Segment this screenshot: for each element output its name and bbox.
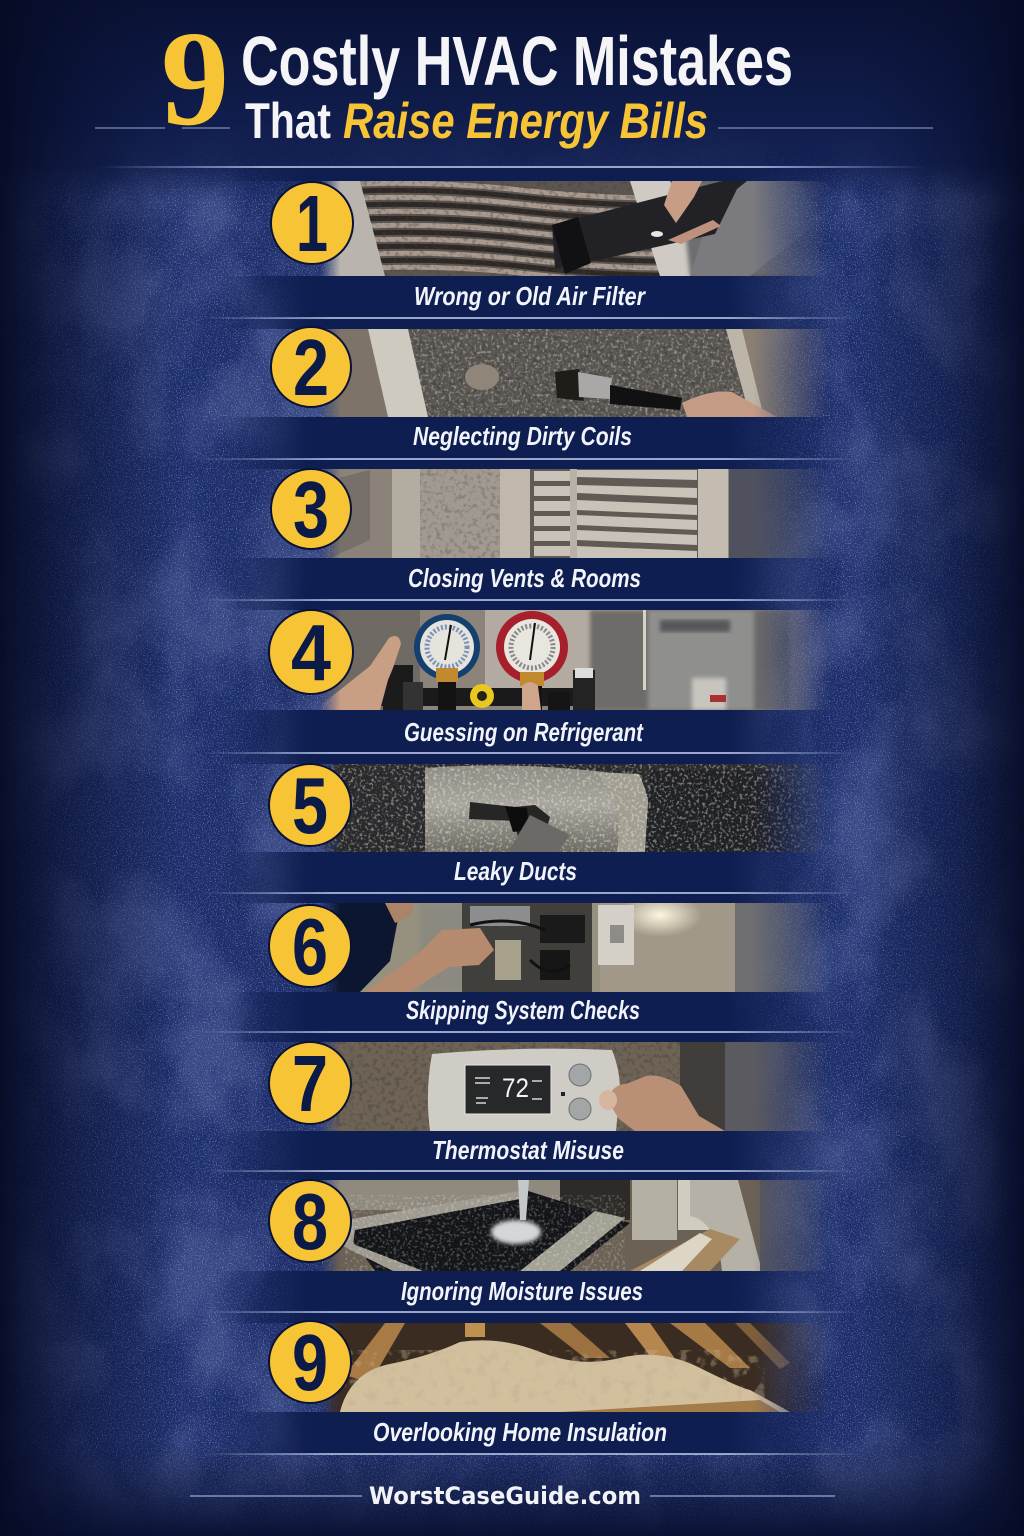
mistake 5 row <box>200 754 860 894</box>
caption 6: Skipping System Checks <box>406 995 640 1025</box>
badge 9: 9 <box>292 1318 328 1407</box>
technician <box>320 903 398 992</box>
caption 2: Neglecting Dirty Coils <box>413 421 632 451</box>
caption 1: Wrong or Old Air Filter <box>414 281 647 311</box>
badge 5: 5 <box>292 761 328 850</box>
badge 3 <box>271 465 351 554</box>
badge 8 <box>269 1177 351 1266</box>
hand <box>315 636 401 710</box>
badge 6 <box>269 902 351 991</box>
brush <box>555 369 584 401</box>
manifold <box>381 688 573 706</box>
caption 7: Thermostat Misuse <box>432 1135 624 1165</box>
title line 2: That <box>245 93 331 149</box>
mistake 9 row <box>200 1313 860 1455</box>
mistake 2 row <box>200 319 860 460</box>
badge 1: 1 <box>296 179 328 268</box>
hand <box>664 181 702 223</box>
title numeral 9: 9 <box>161 4 229 154</box>
mistake 8 row <box>200 1172 860 1313</box>
photo: dirty coils <box>320 329 836 417</box>
mistake 6 row <box>200 893 860 1033</box>
mistake 1 row <box>200 168 860 319</box>
photo: thermostat <box>320 1042 835 1131</box>
caption 4: Guessing on Refrigerant <box>404 717 644 747</box>
footer website: WorstCaseGuide.com <box>369 1482 641 1510</box>
title block <box>95 4 933 154</box>
photo: torn duct <box>320 764 830 852</box>
caption 3: Closing Vents & Rooms <box>408 563 641 593</box>
mistake 7 row <box>200 1033 860 1172</box>
mistake 3 row <box>200 460 860 601</box>
badge 4 <box>269 608 353 697</box>
badge 2 <box>271 323 351 412</box>
photo: attic insulation <box>320 1323 830 1412</box>
brush <box>552 181 747 269</box>
title ornament lines <box>95 127 933 129</box>
caption 9: Overlooking Home Insulation <box>373 1417 667 1447</box>
photo: refrigerant gauges <box>315 610 830 710</box>
badge 8: 8 <box>292 1177 328 1266</box>
photo: technician checks system <box>322 903 822 992</box>
hand <box>606 1075 725 1131</box>
badge 7 <box>269 1039 351 1128</box>
gauges <box>414 614 480 680</box>
control panel <box>462 903 592 992</box>
photo: leaking drip pan <box>320 1180 830 1271</box>
mistake 4 row <box>200 601 860 754</box>
badge 4: 4 <box>291 608 331 697</box>
photo: air filter being brushed <box>320 181 830 282</box>
badge 3: 3 <box>293 465 329 554</box>
photo: closed vents <box>320 469 839 559</box>
badge 7: 7 <box>292 1039 328 1128</box>
caption 5: Leaky Ducts <box>454 856 577 886</box>
badge 1 <box>271 179 353 268</box>
caption 8: Ignoring Moisture Issues <box>401 1276 643 1306</box>
display reading: 72 <box>502 1073 529 1103</box>
badge 5 <box>269 761 351 850</box>
title highlight: Raise Energy Bills <box>343 93 708 149</box>
badge 9 <box>269 1318 351 1407</box>
title line 1: Costly HVAC Mistakes <box>241 22 793 100</box>
badge 2: 2 <box>293 323 329 412</box>
badge 6: 6 <box>292 902 328 991</box>
